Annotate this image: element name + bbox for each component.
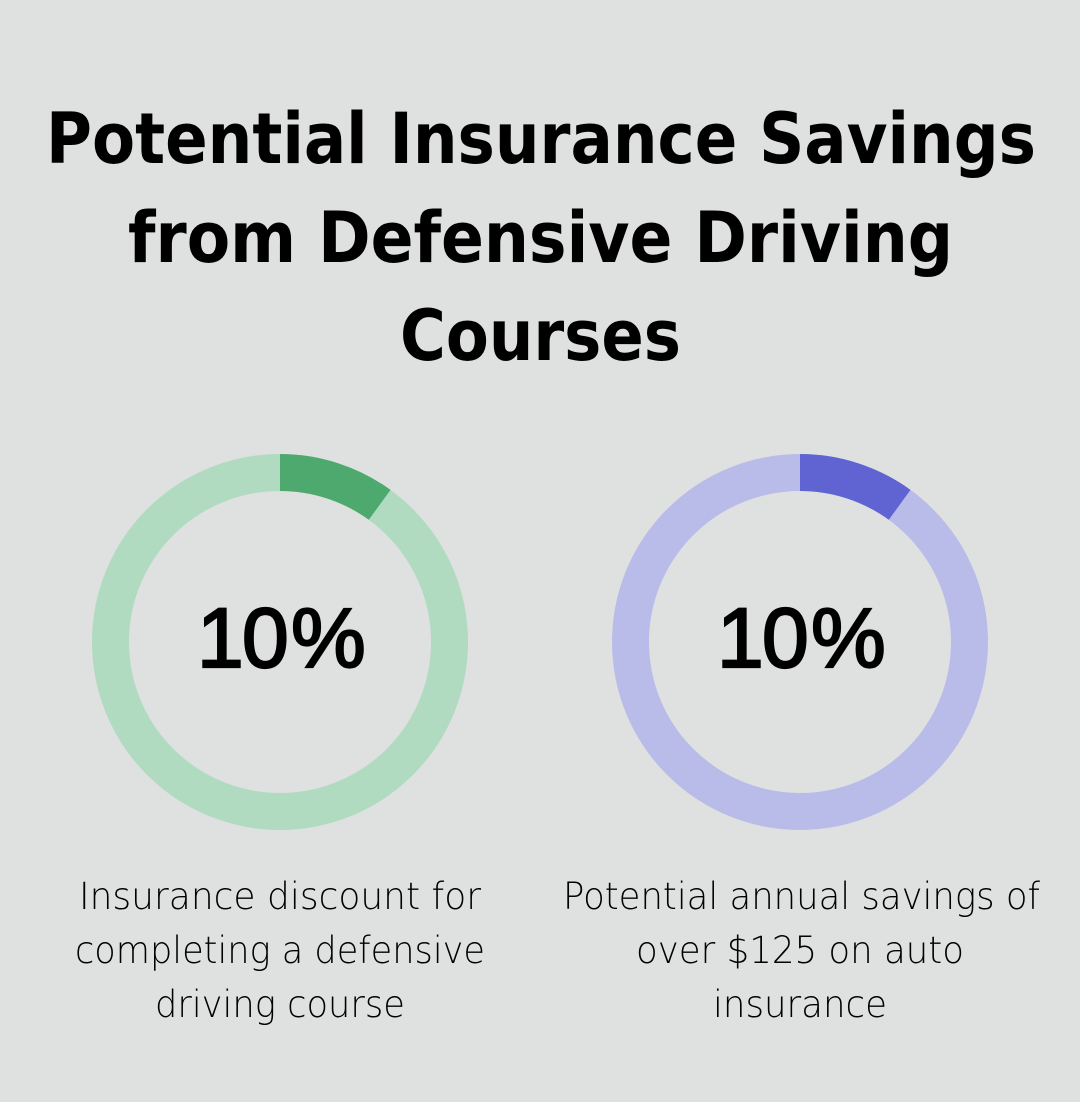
label: annual savings: insurance bbox=[713, 983, 887, 1026]
panel: annual savings bbox=[563, 454, 1040, 1026]
title bbox=[46, 98, 1036, 377]
label: insurance discount: completing a defensive bbox=[75, 929, 485, 972]
value: 10%: 10% bbox=[717, 591, 886, 685]
label: insurance discount: Insurance discount for bbox=[79, 875, 482, 918]
label: annual savings bbox=[563, 875, 1040, 1026]
donut chart: purple 10% bbox=[630, 454, 970, 812]
title: from Defensive Driving bbox=[128, 197, 953, 279]
label: insurance discount bbox=[75, 875, 485, 1026]
title: Courses bbox=[400, 295, 681, 377]
label: insurance discount: driving course bbox=[155, 983, 405, 1026]
label: annual savings: over $125 on auto bbox=[636, 929, 964, 972]
panel: insurance discount bbox=[75, 454, 485, 1026]
label: annual savings: Potential annual savings of bbox=[563, 875, 1040, 918]
donut chart: green 10% bbox=[110, 454, 450, 812]
value: 10%: 10% bbox=[197, 591, 366, 685]
